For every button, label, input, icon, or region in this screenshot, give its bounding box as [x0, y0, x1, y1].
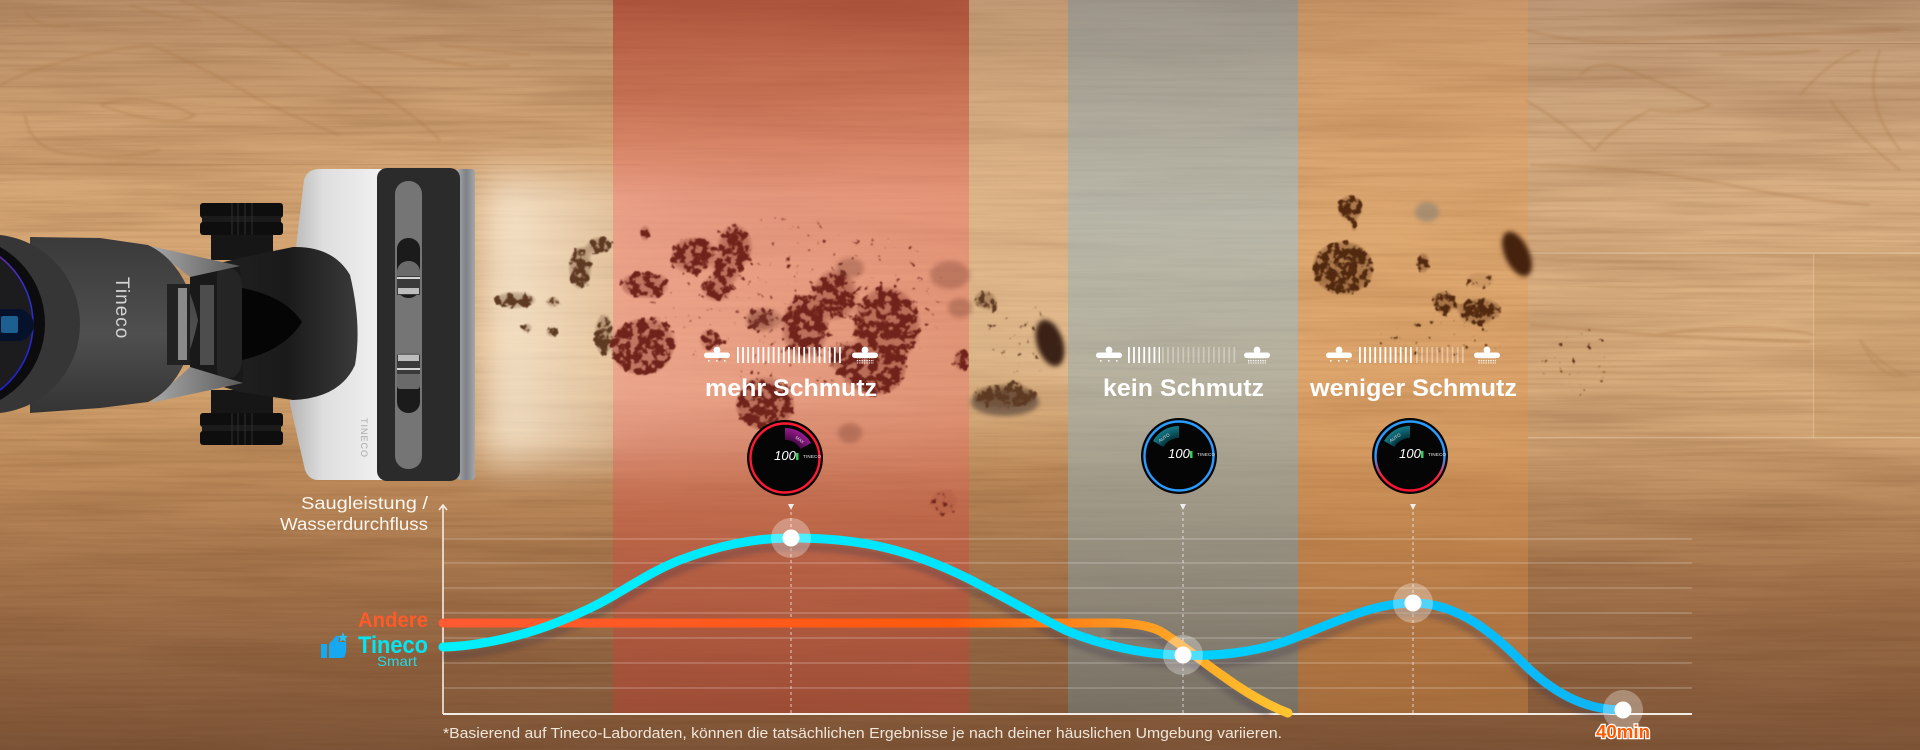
axis label	[280, 493, 428, 534]
icon: suction head left	[1096, 347, 1122, 362]
vacuum cleaner	[0, 168, 475, 481]
marker: 40 min	[1603, 690, 1643, 730]
display dial: TINECO	[1197, 452, 1215, 457]
wheel: bottom	[200, 390, 283, 445]
display dial	[747, 420, 823, 496]
display dial	[1141, 418, 1217, 494]
display dial: 100	[1168, 446, 1191, 461]
marker: no dirt	[1163, 635, 1203, 675]
display dial: AUTO	[1158, 432, 1171, 443]
chart grid lines	[443, 539, 1692, 688]
label: mehr Schmutz	[705, 375, 877, 402]
power scale ticks	[1359, 347, 1466, 363]
pointer	[1410, 504, 1416, 510]
icon: wash head right	[852, 347, 878, 364]
body cylinder	[0, 234, 243, 414]
chart axes	[439, 505, 1692, 714]
panel: red band, more dirt	[613, 0, 969, 714]
line: Tineco	[443, 538, 1623, 710]
nozzle dark cover with slot	[377, 168, 460, 481]
wheel: top	[200, 203, 283, 260]
dirt: orange band and right	[1310, 193, 1620, 398]
legend: Tineco Smart: Smart	[377, 653, 417, 669]
label: kein Schmutz	[1103, 375, 1264, 402]
pointer	[1180, 504, 1186, 510]
dirt: left of red band	[491, 234, 616, 359]
icon: wash head right	[1244, 347, 1270, 364]
dirt: between red and gray band	[969, 288, 1070, 416]
nozzle label: TINECO	[359, 418, 369, 458]
label: weniger Schmutz	[1309, 375, 1517, 402]
column: mehr Schmutz	[704, 347, 878, 510]
display dial	[1372, 418, 1448, 494]
dirt: smudges in red band	[747, 258, 972, 443]
marker: more dirt	[771, 518, 811, 558]
icon: wash head right	[1474, 347, 1500, 364]
marker: less dirt	[1393, 583, 1433, 623]
power scale ticks	[1128, 347, 1236, 363]
axis label: Wasserdurchfluss	[280, 514, 428, 534]
power scale ticks	[737, 347, 844, 363]
line: Andere	[443, 623, 1288, 713]
legend: Tineco Smart: Tineco	[358, 632, 428, 659]
neck and black head dome	[190, 247, 358, 400]
body logo: Tineco	[111, 277, 132, 339]
line shadows	[443, 547, 1610, 714]
column: weniger Schmutz	[1309, 347, 1517, 510]
nozzle side rail	[457, 169, 475, 480]
panel: light strip between red and gray band	[969, 0, 1068, 714]
icon: suction head left	[704, 347, 730, 362]
column: kein Schmutz	[1096, 347, 1270, 510]
display dial: AUTO	[1389, 432, 1402, 443]
nozzle white housing	[290, 169, 385, 480]
display dial: TINECO	[1428, 452, 1446, 457]
display dial: 100	[774, 448, 797, 463]
icon: thumbs up with star	[321, 632, 348, 658]
display dial: TINECO	[803, 454, 821, 459]
time label: 40min: 40min	[1596, 722, 1650, 742]
legend: Tineco Smart	[321, 632, 428, 669]
panel: gray band, no dirt	[1068, 0, 1298, 714]
axis label: Saugleistung /	[301, 493, 428, 513]
legend: Andere: Andere	[358, 609, 428, 632]
display dial: MAX	[794, 435, 805, 445]
footnote: *Basierend auf Tineco-Labordaten, können die tatsächlichen Ergebnisse je nach deiner häuslichen Umgebung variieren.	[443, 725, 1282, 742]
dashed drop lines	[791, 512, 1413, 714]
light glow in front of the nozzle	[480, 175, 980, 465]
dirt: red band	[608, 210, 973, 520]
pointer	[788, 504, 794, 510]
panel: orange band, less dirt	[1298, 0, 1528, 714]
display dial: 100	[1399, 446, 1422, 461]
icon: suction head left	[1326, 347, 1352, 362]
